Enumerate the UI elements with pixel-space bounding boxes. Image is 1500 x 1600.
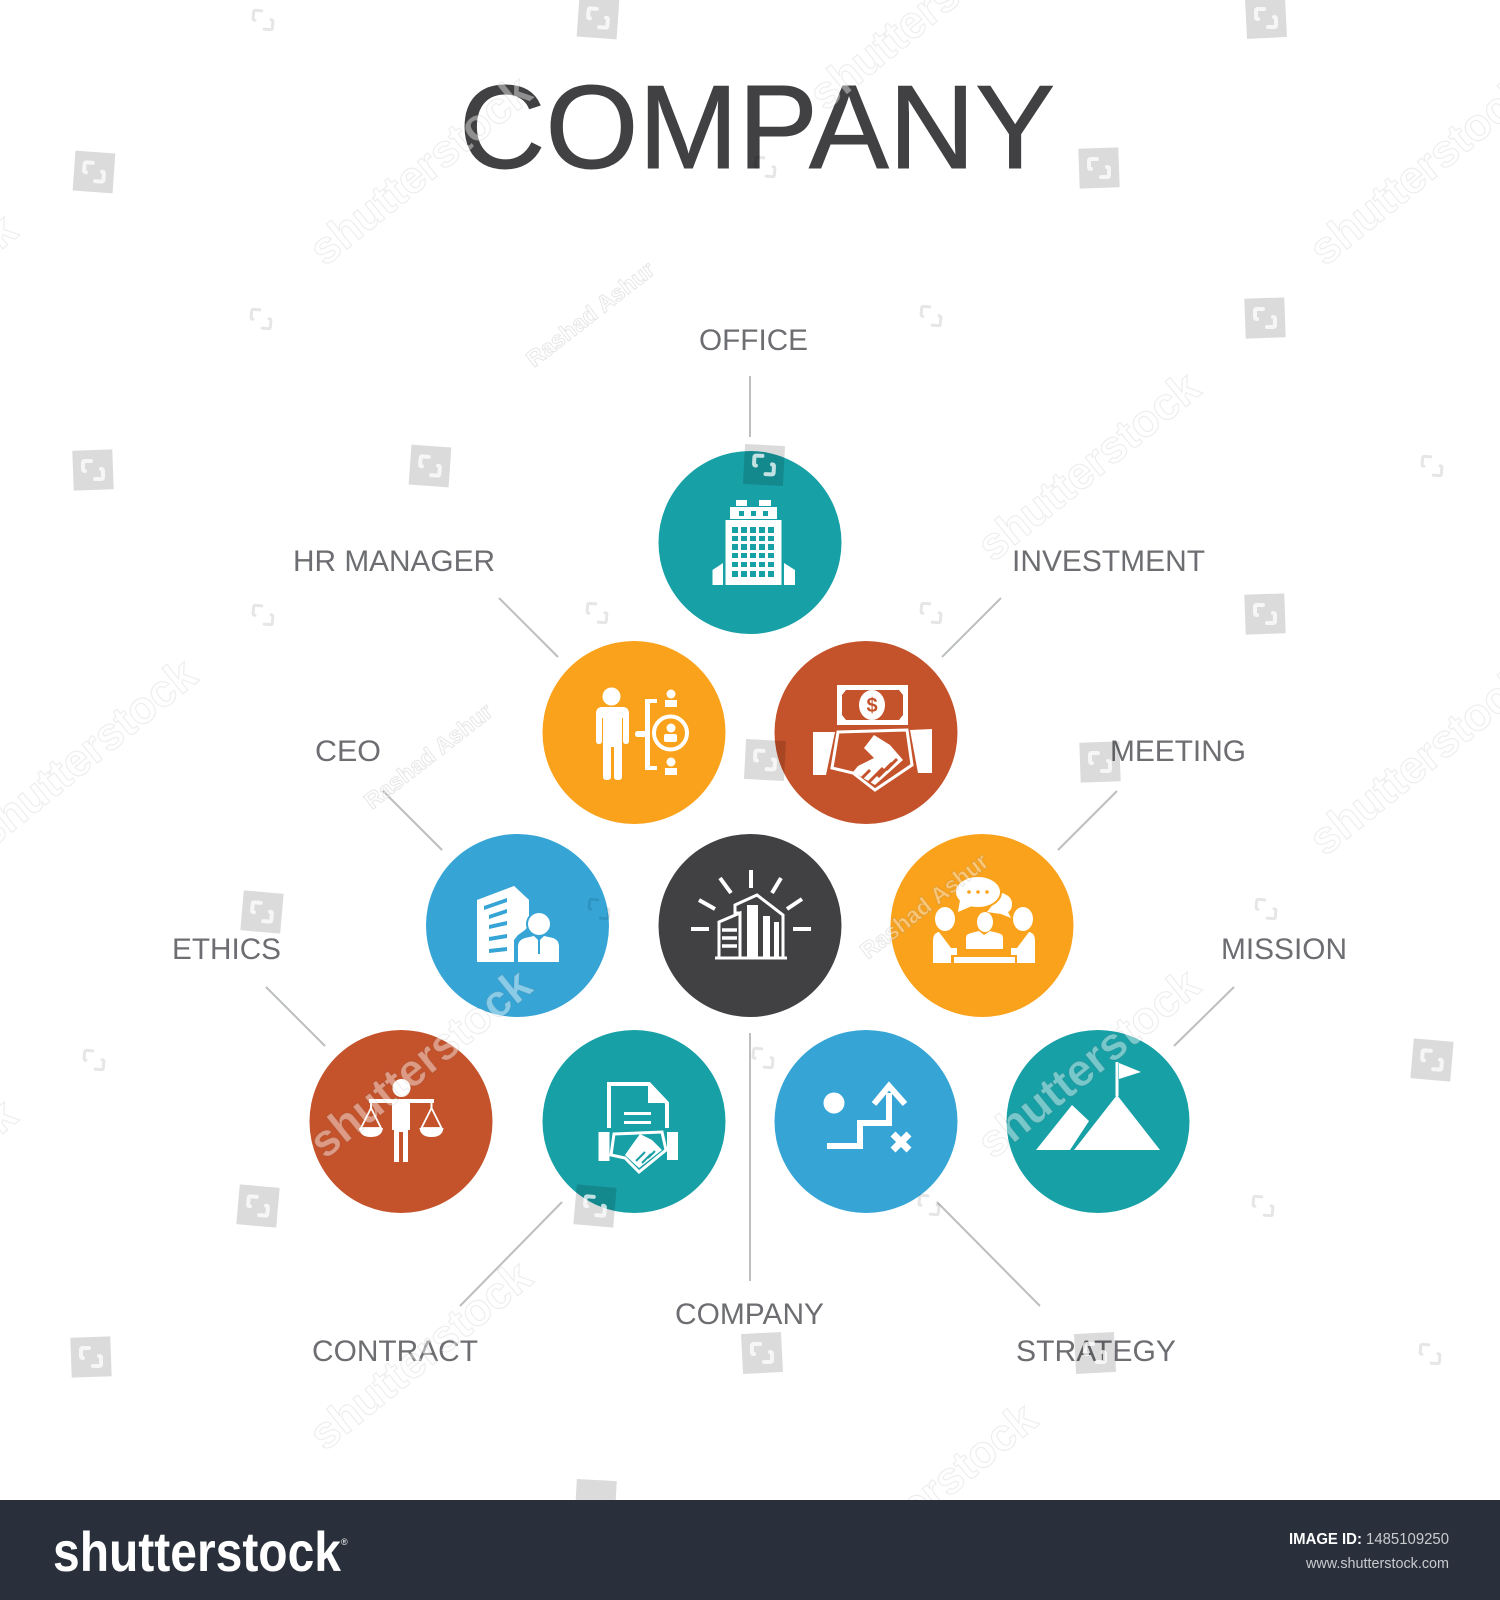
icon: office tower bbox=[712, 500, 795, 585]
watermark: shutterstock wordmarks: shutterstock bbox=[299, 65, 542, 275]
node: investment bbox=[774, 641, 958, 824]
watermark: shutterstock wordmarks: shutterstock bbox=[299, 958, 542, 1168]
node: company center bbox=[658, 834, 842, 1017]
node: meeting bbox=[890, 834, 1074, 1017]
label: office: OFFICE bbox=[699, 324, 808, 357]
image id: IMAGE ID: 1485109250 bbox=[1289, 1531, 1449, 1548]
watermark: contributor name bbox=[359, 256, 993, 964]
label: strategy: STRATEGY bbox=[1016, 1335, 1176, 1368]
label: investment: INVESTMENT bbox=[1012, 545, 1205, 578]
label: ethics: ETHICS bbox=[172, 933, 281, 966]
icon: meeting table bbox=[933, 876, 1035, 963]
icon: building and person bbox=[477, 886, 559, 962]
icon: money handshake bbox=[813, 685, 932, 790]
connector: ethics bbox=[266, 987, 325, 1046]
node: HR manager bbox=[542, 641, 726, 824]
watermark: stamp glyphs bbox=[81, 8, 1443, 1366]
watermark: contributor name: Rashad Ashur bbox=[359, 698, 497, 814]
connector: meeting bbox=[1058, 791, 1117, 850]
icon: contract handshake bbox=[598, 1084, 678, 1172]
node: CEO bbox=[426, 834, 609, 1017]
site url: www.shutterstock.com bbox=[1305, 1555, 1449, 1572]
watermark: shutterstock wordmarks: shutterstock bbox=[967, 958, 1210, 1168]
connector: company bbox=[749, 1033, 751, 1281]
label: HR manager: HR MANAGER bbox=[293, 545, 495, 578]
icon: manager and candidates bbox=[596, 688, 687, 780]
connector: strategy bbox=[937, 1202, 1040, 1306]
icon: money handshake: $ bbox=[866, 695, 878, 717]
footer logo: shutterstock bbox=[53, 1520, 342, 1583]
label: mission: MISSION bbox=[1221, 933, 1347, 966]
connector: CEO bbox=[383, 791, 442, 850]
icon: stairs and arrow bbox=[824, 1086, 909, 1150]
icon: mountain flag bbox=[1036, 1062, 1160, 1150]
connector: HR manager bbox=[499, 598, 558, 657]
icon: person with scales bbox=[359, 1079, 444, 1162]
connector: investment bbox=[942, 598, 1001, 657]
node: office bbox=[658, 451, 842, 634]
connector: mission bbox=[1174, 987, 1234, 1046]
watermark: shutterstock wordmarks: shutterstock bbox=[804, 1392, 1047, 1600]
icon: skyline with rays bbox=[691, 870, 811, 958]
label: contract: CONTRACT bbox=[312, 1335, 478, 1368]
node: strategy bbox=[774, 1030, 958, 1213]
connector: contract bbox=[460, 1202, 562, 1306]
node: contract bbox=[542, 1030, 726, 1213]
watermark: contributor name: Rashad Ashur bbox=[521, 256, 659, 372]
node: mission bbox=[1006, 1030, 1190, 1213]
node: ethics bbox=[310, 1030, 492, 1213]
watermark: contributor name: Rashad Ashur bbox=[855, 848, 993, 964]
label: company: COMPANY bbox=[675, 1298, 824, 1331]
watermark: shutterstock wordmarks: shutterstock bbox=[299, 1250, 542, 1460]
registered mark: ® bbox=[341, 1537, 348, 1547]
watermark: small marks bbox=[83, 10, 1443, 1364]
title: COMPANY bbox=[459, 61, 1055, 194]
watermark: shutterstock wordmarks: shutterstock bbox=[967, 361, 1210, 571]
label: CEO: CEO bbox=[315, 735, 381, 768]
label: meeting: MEETING bbox=[1110, 735, 1246, 768]
connector: office bbox=[749, 376, 751, 437]
footer bar bbox=[0, 1500, 1500, 1600]
